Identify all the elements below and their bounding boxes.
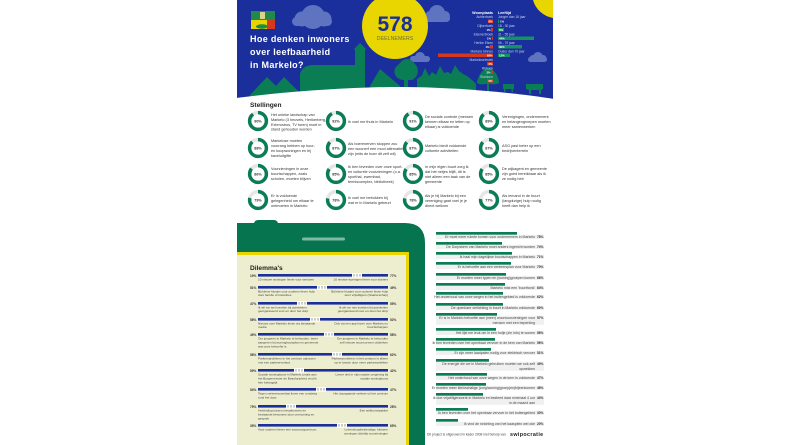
statement 3	[405, 113, 473, 129]
statement 4: meer samenwerken	[502, 125, 535, 129]
statement 3: De sociale controle (mensen	[425, 115, 473, 119]
dilemma 1: 19%	[250, 274, 257, 278]
row 13: De energie die we in Markelo gebruiken moeten we ook zelf	[442, 362, 535, 366]
statement 6: Als boerenerven stoppen zou	[348, 142, 397, 146]
chart: woonplaats: 6%	[488, 62, 493, 66]
dilemma 8: 47%	[390, 388, 397, 392]
chart: woonplaats: Woonplaats	[472, 11, 493, 15]
statement 11: In mijn eigen buurt zorg ik	[425, 165, 469, 169]
statement 1: Markelo (3 heuvels, Herikerberg,	[271, 118, 326, 122]
statement 5: Markelose moeten	[271, 139, 302, 143]
row 17: 30%	[537, 411, 544, 415]
chart: woonplaats: Markelosebroek	[470, 58, 493, 62]
dilemma 4: Ook via een app lezen over Markelo en	[334, 322, 388, 326]
dilemma 10: woningen dichtbij voorzieningen	[344, 432, 388, 436]
row 5: 66%	[537, 276, 544, 280]
footer credit: Dit project is uitgevoerd in kader 2008 met behulp van	[427, 432, 506, 436]
statement 10: sporthal, zwembad,	[348, 175, 381, 179]
row 18: 20%	[537, 422, 544, 426]
row 16	[433, 393, 544, 405]
statement 7: Markelo biedt voldoende	[425, 144, 466, 148]
row 1: Er moet meer ruimte komen voor ondernemers in Markelo	[445, 235, 535, 239]
row 12: 51%	[537, 351, 544, 355]
dilemma 3: Ik wil me wel inzetten bij activiteiten	[258, 306, 307, 310]
dilemma 6: 58%	[250, 353, 257, 357]
statement 12: ze nodig heb	[502, 177, 524, 181]
row 16: 44%	[537, 396, 544, 400]
dilemma 9: 28%	[390, 405, 397, 409]
footer credit	[427, 432, 544, 438]
row 3: Ik haal mijn dagelijkse boodschappen in Markelo	[460, 255, 535, 259]
row 18	[436, 419, 544, 426]
dilemma 9: gesprek	[258, 416, 269, 420]
row 13	[436, 359, 544, 371]
dilemma 3: georganiseerd voor en door het dorp	[258, 309, 309, 313]
row 6	[436, 283, 544, 290]
row 13: 49%	[537, 362, 544, 366]
dilemma 10: Voor ouderen liever een woonzorgcentrum	[258, 428, 317, 432]
statement 12: De wijkagent en gemeente	[502, 167, 547, 171]
dilemma 5: wat onze behoefte is	[258, 344, 287, 348]
chart: leeftijd: 18 - 30 jaar	[498, 24, 516, 28]
statement 12: zijn goed bereikbaar als ik	[502, 172, 546, 176]
dilemma 9	[250, 404, 397, 420]
statement 8: 87%	[485, 146, 493, 150]
dilemma 8: 54%	[250, 388, 257, 392]
dilemma 6: Parkeerprobleem in het centrum oplossen	[258, 356, 316, 360]
statement 16: heeft dan help ik	[502, 204, 530, 208]
chart: leeftijd: 13%	[499, 54, 505, 58]
tree	[394, 59, 418, 90]
spiky tree line	[417, 65, 476, 92]
chart: leeftijd: 56 - 70 jaar	[498, 41, 516, 45]
statement 2	[328, 113, 393, 129]
white curve below header	[236, 87, 554, 104]
row 7: Het onderhoud van onze wegen in het buitengebied is voldoende	[434, 295, 535, 299]
statement 10: tenniscomplex, bibliotheek)	[348, 180, 395, 184]
statement 9: 86%	[254, 172, 262, 176]
title: over leefbaarheid	[250, 47, 330, 57]
dilemma 7: 59%	[250, 369, 257, 373]
dilemma 8: Het doorgaande verkeer uit het centrum	[333, 392, 388, 396]
statement 10: 85%	[332, 172, 340, 176]
dilemma 2: 49%	[390, 286, 397, 290]
statement 14: 78%	[332, 198, 340, 202]
chart: woonplaats	[438, 11, 493, 83]
row 10: 56%	[537, 331, 544, 335]
dilemma 7: sociale woningbouw	[360, 376, 389, 380]
row 3: 71%	[537, 255, 544, 259]
chart: woonplaats: Herike Elsen	[474, 41, 493, 45]
icon: cloud lower right	[528, 52, 547, 62]
chart: woonplaats: 1%	[485, 45, 490, 49]
statement 1: 90%	[254, 119, 262, 123]
title: Hoe denken inwoners	[250, 34, 350, 44]
statement 5: kaveluitgifte	[271, 154, 291, 158]
row 2: 74%	[537, 245, 544, 249]
row 16: Ik doe vrijwilligerswerk in Markelo en besteed daar minimaal 4 uur	[433, 396, 536, 400]
row 12: Er zijn meer laadpalen nodig voor elektrisch vervoer	[454, 351, 536, 355]
statement 15: 78%	[409, 198, 417, 202]
dilemma 8: Tegen verkeersoverlast liever een rondweg	[258, 392, 317, 396]
statement 4	[481, 113, 551, 129]
dilemma 4: buurtschappen	[368, 325, 388, 329]
row 11: Ik ben tevreden over het openbaar vervoer in de kern van Markelo	[432, 341, 535, 345]
cow	[503, 84, 514, 92]
chart: woonplaats: 68%	[487, 54, 493, 58]
statement 2: Ik voel me thuis in Markelo	[348, 120, 393, 124]
panel: header	[236, 0, 554, 104]
dilemma 3: georganiseerd voor en door het dorp	[338, 309, 388, 313]
row 14	[436, 373, 544, 380]
statement 1: stand gehouden worden	[271, 127, 312, 131]
dilemma 10: Levensloopbestendige, kleinere	[344, 428, 388, 432]
dilemma 7: het Burgemeester de Beaufortplein) vind ik	[258, 376, 317, 380]
icon: sun corner	[533, 0, 553, 18]
row 5: Er moeten meer typen en (woning)groepen komen	[457, 276, 535, 280]
dilemma 2: 51%	[250, 286, 257, 290]
footer credit: swipocratie	[510, 432, 544, 438]
dilemma 4: 52%	[390, 318, 397, 322]
chart: woonplaats: 1%	[487, 36, 492, 40]
participant count circle: 578	[377, 13, 413, 36]
chart: leeftijd: 44%	[499, 36, 505, 40]
chart: leeftijd: Leeftijd	[498, 11, 512, 15]
row 9: 57%	[537, 316, 544, 320]
dilemma 7: Sociale woningbouw in Markelo (zoals aan	[258, 372, 317, 376]
round tree	[477, 68, 499, 92]
title	[250, 34, 350, 70]
dilemma 6: op te lossen door meer parkeerplekken	[334, 360, 388, 364]
dilemma 1	[250, 273, 397, 282]
chart: leeftijd: Jonger dan 18 jaar	[498, 15, 526, 19]
statement 13	[250, 192, 314, 208]
statement 14	[328, 192, 392, 208]
row 15	[432, 383, 544, 390]
dilemma 6: 62%	[390, 353, 397, 357]
dilemma 3: 47%	[250, 302, 257, 306]
statement 13: Er is voldoende	[271, 194, 297, 198]
row 6: Markelo mist een 'buurthonk'	[490, 286, 535, 290]
dilemma 10	[250, 423, 397, 436]
dilemma 5: zelf nieuwe woonvormen uitdenken	[340, 340, 388, 344]
statement 15: Als je bij Markelo bij een	[425, 194, 466, 198]
dilemma 10: 65%	[390, 424, 397, 428]
chart: leeftijd: 1%	[500, 20, 505, 24]
statement 5: en koopwoningen en bij	[271, 149, 311, 153]
panel: statements	[250, 113, 551, 208]
dilemma 4	[250, 317, 397, 329]
dilemma 5: Om jongeren in Markelo te behouden	[337, 336, 388, 340]
chart: leeftijd	[498, 11, 534, 58]
statement 16: (langdurige) hulp nodig	[502, 199, 541, 203]
row 4: Er is behoefte aan een verkeersplan voor Markelo	[458, 265, 535, 269]
row 2: De Dorpskern van Markelo moet anders ingericht worden	[446, 245, 535, 249]
statement 11: gemeente	[425, 180, 442, 184]
dilemma 7: hier belangrijk	[258, 380, 278, 384]
statement 16: Als iemand in de buurt	[502, 194, 541, 198]
statement 5	[250, 139, 316, 158]
chart: woonplaats: 6%	[488, 79, 493, 83]
statement 7: 87%	[409, 146, 417, 150]
dilemma 3: Ik wil me niet inzetten bij activiteiten	[339, 306, 388, 310]
heading: Dilemma's: Dilemma's	[250, 265, 283, 272]
row 16: in de maand aan	[509, 401, 535, 405]
phone speaker	[302, 238, 345, 240]
row 15: 46%	[537, 386, 544, 390]
statement 11: 85%	[409, 172, 417, 176]
statement 9	[250, 166, 311, 182]
statement 6	[328, 140, 404, 156]
chart: woonplaats: Stokkum	[480, 75, 493, 79]
statement 10	[328, 165, 403, 184]
row 9	[436, 313, 544, 325]
dilemma 9: Een welkomstpakket	[360, 408, 388, 412]
statement 4: en belangengroepen moeten	[502, 120, 551, 124]
statement 11: dat het netjes blijft, dit is	[425, 170, 466, 174]
row 5	[436, 273, 544, 280]
statement 8	[481, 140, 541, 156]
chart: woonplaats: Rijhoek	[482, 66, 493, 70]
row 3	[436, 252, 544, 259]
dilemma 4: 58%	[250, 318, 257, 322]
statement 13: 79%	[254, 198, 262, 202]
chart: leeftijd: 6%	[499, 28, 504, 32]
statement 15	[405, 192, 467, 208]
dilemma 8: rond het dorp	[258, 396, 277, 400]
statement 4: 89%	[485, 119, 493, 123]
statement 13: ontmoeten in Markelo	[271, 204, 308, 208]
row 10	[436, 328, 544, 335]
row 13: opwekken	[519, 367, 535, 371]
dilemma 6: met een parkeerverbod	[258, 360, 290, 364]
dilemma 5: 58%	[390, 333, 397, 337]
statement 5: 88%	[254, 146, 262, 150]
dilemma 10: 35%	[250, 424, 257, 428]
landscape silhouette	[250, 43, 543, 98]
chart: woonplaats: Markelo binnen	[470, 50, 493, 54]
dilemma 2: Bij kleine klusjes voor ouderen liever hulp	[331, 290, 388, 294]
statement 3: elkaar) is voldoende	[425, 125, 459, 129]
statement 15: vereniging gaat voel je je	[425, 199, 467, 203]
dilemma 3: 55%	[390, 302, 397, 306]
statement 3: 91%	[409, 119, 417, 123]
dilemma 5: 49%	[250, 333, 257, 337]
row 7: 62%	[537, 295, 544, 299]
row 17: Ik ben tevreden over het openbaar vervoer in het buitengebied	[438, 411, 535, 415]
heading: Stellingen: Stellingen	[250, 102, 282, 109]
dilemma 7	[250, 368, 397, 384]
icon: cloud beside circle	[410, 52, 430, 62]
dilemma 2: door vrijwilligers (Noaberschap)	[345, 293, 388, 297]
row 12	[436, 348, 544, 355]
dilemma 5	[250, 332, 397, 348]
dilemma 6: Parkeerprobleem in het centrum is alleen	[332, 356, 388, 360]
statement 12	[481, 166, 547, 182]
chart: leeftijd: Ouder dan 70 jaar	[498, 50, 525, 54]
dilemma 2	[250, 285, 397, 297]
statement 14: Ik voel me betrokken bij	[348, 196, 388, 200]
statement 2: 92%	[332, 119, 340, 123]
statement 1	[250, 113, 326, 131]
row 7	[434, 292, 544, 299]
statement 6: 87%	[332, 146, 340, 150]
chart: woonplaats: 8%	[488, 20, 493, 24]
chart: woonplaats: Achterhoek	[476, 15, 493, 19]
hills, church and house	[250, 43, 420, 98]
statement 5: voorrang hebben op huur-	[271, 144, 316, 148]
row 9: Er is in Markelo behoefte aan (meer) woonvoorzieningen voor	[439, 316, 536, 320]
statement 9: Voorzieningen in onze	[271, 167, 308, 171]
statement 9: scholen, moeten blijven	[271, 177, 311, 181]
dilemma 1: 77%	[390, 274, 397, 278]
statement 10: Ik ben tevreden over onze sport-	[348, 165, 403, 169]
row 11	[432, 338, 544, 345]
dilemma 1: 10 nieuwe woningen liever voor starters	[333, 278, 388, 282]
row 17	[436, 408, 544, 415]
statement 8: ASG past beter op een	[502, 144, 541, 148]
dilemma 7: Liever niet in mijn naaste omgeving bij	[336, 372, 388, 376]
statement 9: buurtschappen, zoals	[271, 172, 307, 176]
row 8	[436, 303, 544, 310]
icon: coat of arms flag	[251, 11, 275, 29]
statement 16: 77%	[485, 198, 493, 202]
dilemma 1: 10 nieuwe woningen liever voor senioren	[258, 278, 314, 282]
dilemma 2: door familie of instanties	[258, 293, 292, 297]
dilemma 9: bestaande bewoners door ontmoeting en	[258, 412, 315, 416]
chart: woonplaats: Dijkerhoek	[477, 24, 493, 28]
dilemma 9: Verbinding tussen nieuwkomers en	[258, 408, 306, 412]
row 14: 47%	[537, 376, 544, 380]
dilemma 8	[250, 387, 397, 400]
chart: woonplaats: Elsenerbroek	[474, 32, 493, 36]
statement 1: Exterosbos, TV toren) moet in	[271, 123, 321, 127]
row 2	[436, 242, 544, 249]
chart: horizontal statements	[432, 232, 544, 426]
statement 14: wat er in Markelo gebeurt	[348, 201, 392, 205]
panel: phone with dilemmas	[237, 220, 425, 445]
row 8: De openbare verlichting in buurt in Markelo voldoende	[451, 306, 535, 310]
statement 1: Het unieke landschap van	[271, 113, 315, 117]
dilemma 9: 75%	[250, 405, 257, 409]
row 15: Er moeten meer kleinschalige (zorg/woning)groep(en)bijeenkomen	[432, 386, 535, 390]
row 1: 78%	[537, 235, 544, 239]
statement 10: en culturele voorzieningen (o.a.	[348, 170, 401, 174]
participant count circle: DEELNEMERS	[377, 36, 414, 42]
row 14: Het onderhoud van onze wegen in de kern is voldoende	[448, 376, 535, 380]
row 10: Het lijkt me leuk om in een hofje (zie info) te wonen	[456, 331, 535, 335]
statement 8: bedrijventerrein	[502, 149, 528, 153]
statement 7: culturele activiteiten	[425, 149, 458, 153]
dilemma 6	[250, 352, 397, 364]
statement 16	[481, 192, 541, 208]
chart: leeftijd: 31 - 55 jaar	[498, 32, 516, 36]
statement 11	[405, 165, 470, 184]
icon: cloud upper right	[425, 5, 450, 22]
chart: woonplaats: 1%	[486, 28, 491, 32]
chart: leeftijd: 36%	[499, 45, 505, 49]
participant count circle	[362, 0, 428, 59]
statement 3: kennen elkaar en letten op	[425, 120, 470, 124]
dilemma 5: aangeven bij woningbouwplan en gemeente	[258, 340, 319, 344]
dilemma 4: media	[258, 325, 267, 329]
row 11: 56%	[537, 341, 544, 345]
row 8: 60%	[537, 306, 544, 310]
statement 12: 85%	[485, 172, 493, 176]
cow	[526, 84, 543, 94]
chart: woonplaats: 2%	[486, 70, 491, 74]
statement 4: Verenigingen, ondernemers	[502, 115, 549, 119]
dilemma 7: 42%	[390, 369, 397, 373]
statement 7	[405, 140, 466, 156]
row 18: Ik vind de inrichting van het kaasplein wel oké	[464, 422, 535, 426]
statement 11: niet alleen een taak van de	[425, 175, 470, 179]
dilemma 3	[250, 301, 397, 313]
row 4: 70%	[537, 265, 544, 269]
dilemma 4: Nieuws over Markelo lezen via bestaande	[258, 322, 316, 326]
statement 6: een woonerf een mooi alternatief	[348, 147, 404, 151]
statement 6: zijn (mits de boer dit zelf wil)	[348, 152, 396, 156]
row 6: 64%	[537, 286, 544, 290]
statement 13: gelegenheid om elkaar te	[271, 199, 314, 203]
dilemma 2: Bij kleine klusjes voor ouderen liever hulp	[258, 290, 315, 294]
tree	[420, 68, 431, 90]
dilemma 5: Om jongeren in Markelo te behouden, beter	[258, 336, 318, 340]
row 4	[436, 262, 544, 269]
row 9: mensen met een beperking	[493, 321, 535, 325]
icon: cloud left	[292, 5, 332, 29]
title: in Markelo?	[250, 60, 304, 70]
statement 15: direct welkom	[425, 204, 448, 208]
row 1	[436, 232, 544, 239]
